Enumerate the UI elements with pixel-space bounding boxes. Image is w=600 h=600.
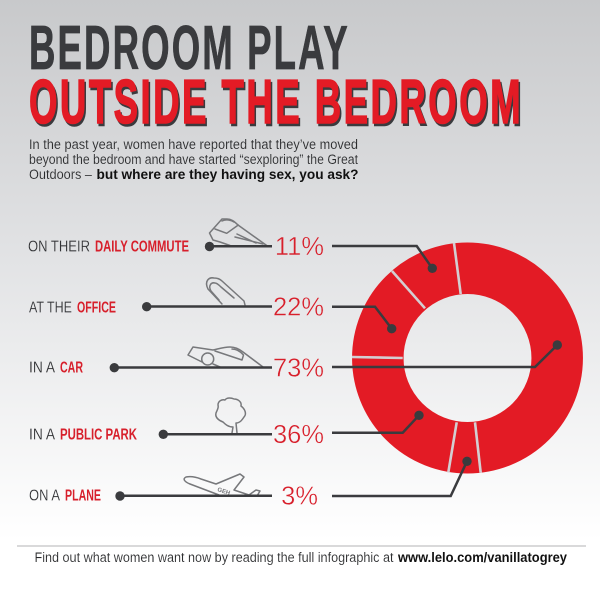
- row: car: [29, 340, 562, 382]
- row: office: [29, 278, 396, 333]
- label: DAILY COMMUTE: [95, 239, 189, 256]
- label: [29, 488, 101, 505]
- title line 2: OUTSIDE THE BEDROOM: [30, 69, 525, 139]
- title line 2: OUTSIDE THE BEDROOM: [29, 67, 523, 136]
- footer text: Find out what women want now by reading the full infographic at: [34, 550, 394, 565]
- icon: car: [188, 347, 263, 367]
- leader line left: [205, 242, 272, 251]
- icon: tree: [216, 398, 245, 433]
- label: IN A: [29, 360, 56, 377]
- intro text: Outdoors –: [29, 167, 92, 182]
- label: CAR: [60, 360, 83, 377]
- title line 1: BEDROOM PLAY: [29, 13, 350, 82]
- percentage: 22%: [273, 294, 324, 322]
- icon: plane: [184, 474, 260, 497]
- label: [29, 299, 116, 316]
- icon: paper clip: [207, 278, 245, 305]
- title: [29, 13, 525, 139]
- label: AT THE: [29, 299, 72, 316]
- percentage: 3%: [281, 482, 318, 510]
- intro text: beyond the bedroom and have started “sexploring” the Great: [29, 152, 358, 167]
- row: public park: [29, 398, 424, 449]
- icon: plane: GEH: [216, 487, 231, 497]
- intro text: In the past year, women have reported that they’ve moved: [29, 137, 358, 152]
- intro text: [29, 137, 358, 182]
- row: plane: [29, 457, 472, 510]
- connector: [332, 457, 472, 496]
- percentage: 11%: [275, 233, 324, 261]
- leader line left: [110, 363, 272, 372]
- intro text: but where are they having sex, you ask?: [96, 167, 358, 182]
- row: daily commute: [28, 219, 437, 273]
- label: [29, 360, 83, 377]
- label: [29, 426, 138, 443]
- label: PUBLIC PARK: [60, 426, 138, 443]
- footer text: www.lelo.com/vanillatogrey: [397, 550, 567, 565]
- percentage: 73%: [273, 354, 324, 382]
- donut chart: [352, 243, 557, 473]
- connector: [332, 411, 424, 433]
- footer rule: [17, 545, 586, 547]
- percentage: 36%: [273, 421, 324, 449]
- label: OFFICE: [77, 299, 116, 316]
- icon: train: [210, 219, 267, 246]
- label: [28, 239, 189, 256]
- leader line left: [142, 302, 272, 311]
- leader line left: [159, 430, 272, 439]
- label: ON A: [29, 488, 61, 505]
- label: ON THEIR: [28, 239, 90, 256]
- connector: [332, 307, 396, 333]
- label: PLANE: [65, 488, 101, 505]
- label: IN A: [29, 426, 56, 443]
- leader line left: [115, 491, 272, 501]
- connector: [332, 340, 562, 367]
- connector: [332, 246, 437, 273]
